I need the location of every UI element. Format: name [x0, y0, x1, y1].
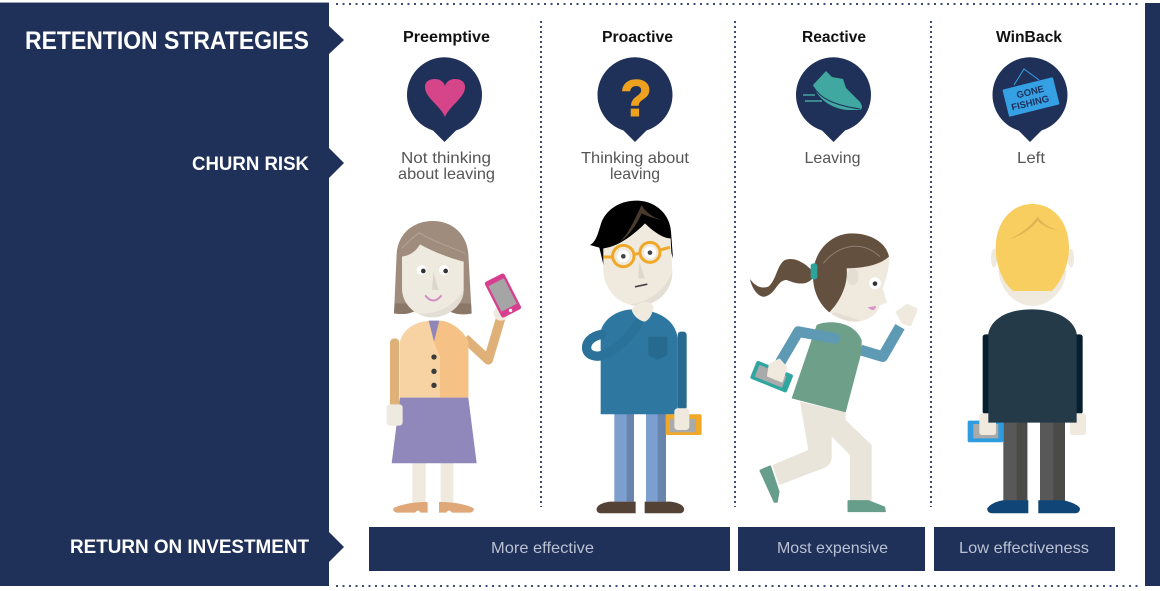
column heading: proactive: Proactive [602, 29, 673, 46]
text: thinking about leaving: Thinking about [581, 150, 690, 167]
figure: man seen from behind [968, 204, 1086, 513]
column heading: reactive: Reactive [802, 29, 866, 46]
box: more effective: More effective [491, 540, 594, 557]
figure: man with glasses thinking [587, 201, 702, 513]
icon: question mark pin [597, 57, 672, 142]
icon: heart pin [407, 57, 482, 142]
panel: right edge bar [1145, 3, 1160, 586]
panel: left sidebar [0, 2, 344, 586]
icon: gone fishing sign pin: GONE [1015, 84, 1045, 101]
icon: gone fishing sign pin: FISHING [1010, 94, 1050, 114]
box: more effective [369, 527, 730, 571]
heading: churn risk: CHURN RISK [192, 154, 309, 175]
box: most expensive: Most expensive [777, 540, 888, 557]
figure: woman running with ponytail [750, 233, 916, 511]
icon: gone fishing sign pin [992, 57, 1067, 142]
heading: return on investment: RETURN ON INVESTMENT [70, 537, 309, 558]
text: not thinking about leaving: about leaving [398, 166, 495, 183]
box: most expensive [738, 527, 925, 571]
figure: woman holding pink phone [387, 221, 522, 513]
text: thinking about leaving [581, 150, 690, 183]
icon: question mark pin: ? [620, 70, 652, 128]
column heading: winback: WinBack [996, 29, 1062, 46]
box: low effectiveness [934, 527, 1115, 571]
icon: running shoe pin [796, 57, 871, 142]
text: leaving: Leaving [804, 150, 860, 167]
box: low effectiveness: Low effectiveness [959, 540, 1089, 557]
text: left: Left [1017, 150, 1046, 167]
text: not thinking about leaving [398, 150, 495, 183]
text: not thinking about leaving: Not thinking [401, 150, 491, 167]
column heading: preemptive: Preemptive [403, 29, 490, 46]
text: thinking about leaving: leaving [610, 166, 660, 183]
heading: retention strategies: RETENTION STRATEGIES [25, 27, 309, 55]
